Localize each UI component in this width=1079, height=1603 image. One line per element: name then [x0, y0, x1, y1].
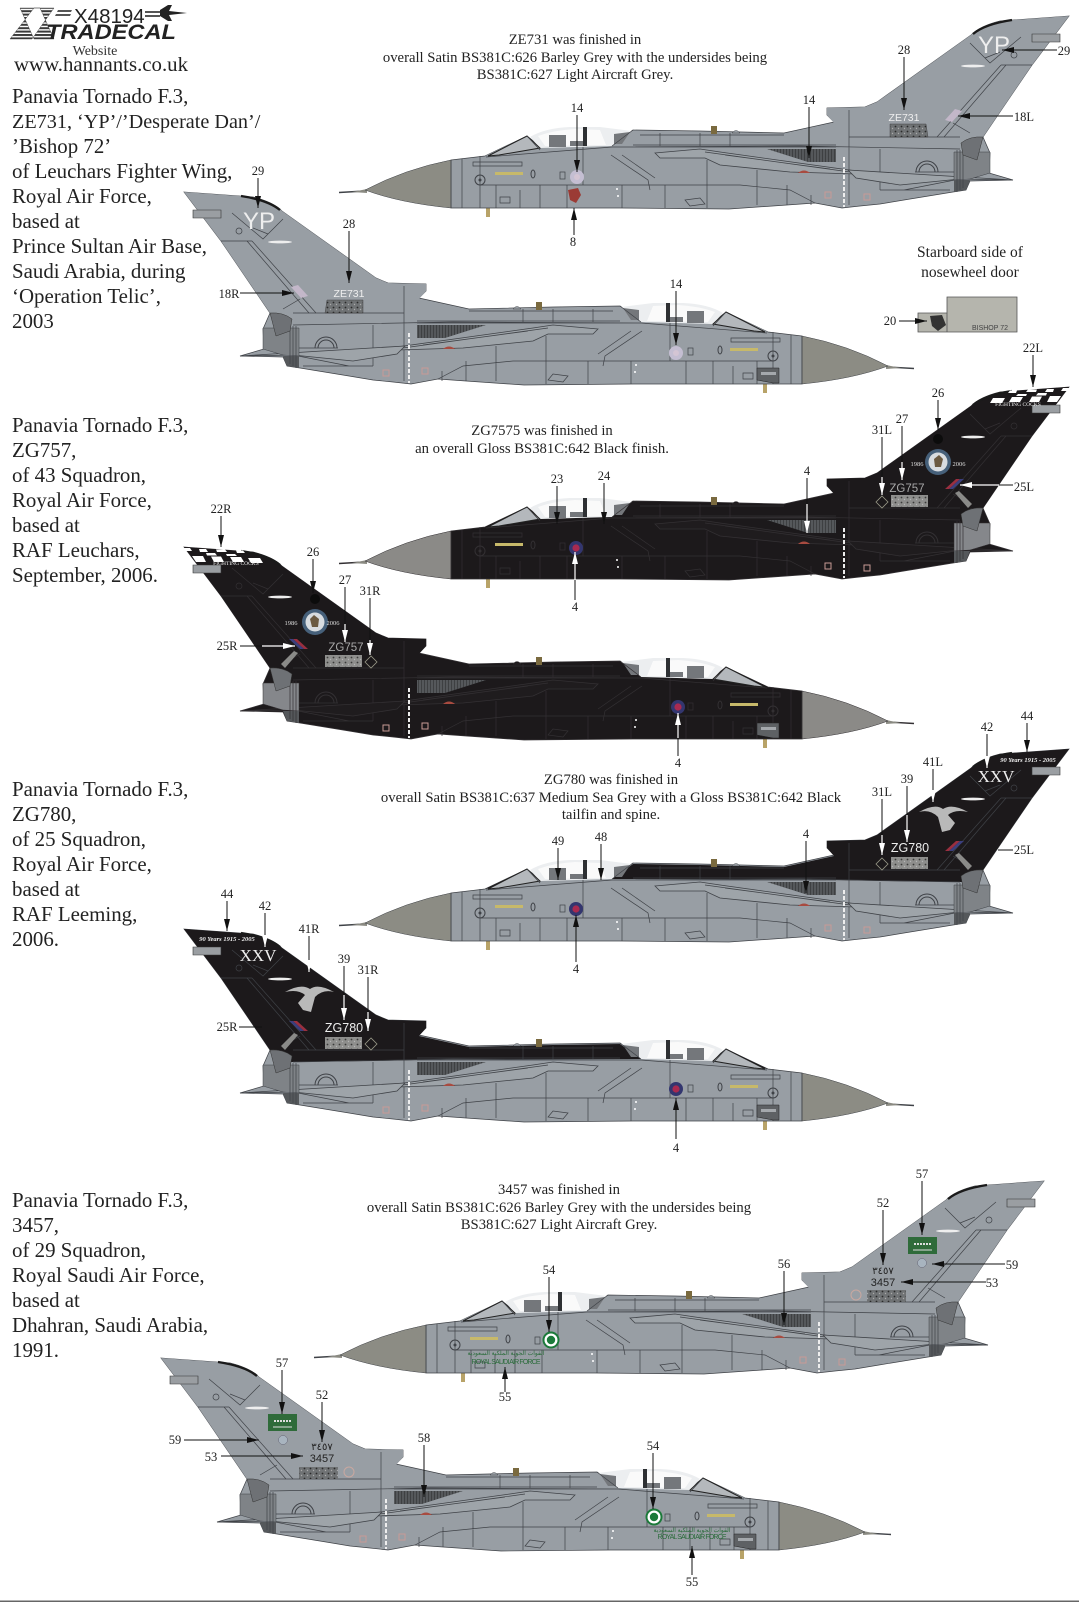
callouts: ZG757: 4	[675, 756, 682, 770]
logo: Xtradecal X48194: TRADECAL	[46, 20, 176, 44]
serial and fin text starboard	[213, 561, 364, 654]
serial ZE731: ZE731	[889, 112, 920, 124]
aircraft: ZG780 starboard side	[184, 929, 914, 1130]
serial and fin text: 1986	[910, 461, 924, 468]
text block: ZG757 description: Royal Air Force,	[12, 488, 152, 512]
callouts: ZE731	[219, 43, 1070, 345]
callouts: ZG757: 31R	[360, 584, 381, 598]
door text: BISHOP 72	[972, 325, 1008, 332]
caption: ZG757 finish: ZG7575 was finished in	[471, 423, 613, 439]
callout 20: 20	[884, 314, 896, 328]
fin code YP starboard: YP	[243, 208, 275, 235]
serial and fin text: 90 Years 1915 - 2005	[1000, 757, 1056, 764]
caption: ZG757 finish: an overall Gloss BS381C:642 Black finish.	[415, 441, 669, 457]
callouts: ZG757: 25R	[217, 639, 238, 653]
text block: ZE731 description: Prince Sultan Air Base,	[12, 234, 207, 258]
caption: ZE731 finish: ZE731 was finished in	[509, 32, 642, 48]
serial and fin text starboard: XXV	[240, 946, 277, 965]
text block: ZE731 description: Saudi Arabia, during	[12, 259, 186, 283]
serial and fin text: XXV	[978, 767, 1015, 786]
logo: Xtradecal X48194	[10, 5, 189, 76]
text block: ZE731 description: Panavia Tornado F.3,	[12, 84, 188, 108]
text block: ZG780 description: based at	[12, 877, 80, 901]
callouts: 3457: 59	[169, 1433, 181, 1447]
callouts: ZG757: 4	[804, 464, 811, 478]
text block: ZE731 description: based at	[12, 209, 80, 233]
serial and fin text starboard: FIGHTING COCKS	[213, 561, 259, 567]
serial and fin text starboard: 1986	[284, 620, 298, 627]
callouts: ZG757	[211, 341, 1043, 770]
text block: ZG780 description: Royal Air Force,	[12, 852, 152, 876]
text block: 3457 description: of 29 Squadron,	[12, 1238, 146, 1262]
text block: ZG780 description: Panavia Tornado F.3,	[12, 777, 188, 801]
aircraft: ZE731 port side	[339, 16, 1069, 217]
callouts: ZG757: 25L	[1014, 480, 1034, 494]
callouts: ZG780: 42	[981, 720, 993, 734]
logo: Xtradecal X48194: Website	[73, 44, 117, 59]
callouts: ZG757: 26	[932, 386, 944, 400]
callouts: ZE731: 29	[252, 164, 264, 178]
fuselage lettering: القوات الجوية الملكية السعودية	[468, 1350, 545, 1357]
caption: 3457 finish: 3457 was finished in	[498, 1182, 621, 1198]
caption: ZG780 finish: overall Satin BS381C:637 Medium Sea Grey with a Gloss BS381C:642 Black	[381, 790, 842, 806]
callouts: ZG757: 27	[896, 412, 908, 426]
serial numbers: ٣٤٥٧	[872, 1266, 894, 1277]
serial ZE731 starboard: ZE731	[334, 288, 365, 300]
callouts: ZG780: 31R	[358, 963, 379, 977]
callouts: ZE731: 28	[898, 43, 910, 57]
callouts: ZG780: 25R	[217, 1020, 238, 1034]
callouts: ZG780: 25L	[1014, 843, 1034, 857]
logo: Xtradecal X48194: X48194	[74, 5, 145, 28]
callouts: ZG780: 4	[803, 827, 810, 841]
callouts: ZG780: 44	[1021, 709, 1034, 723]
text block: ZG757 description: of 43 Squadron,	[12, 463, 146, 487]
callouts: ZG757: 24	[598, 469, 611, 483]
callouts: ZG757: 26	[307, 545, 319, 559]
callouts: ZE731: 8	[570, 235, 576, 249]
logo: Xtradecal X48194: www.hannants.co.uk	[14, 54, 189, 76]
text block: 3457 description: Dhahran, Saudi Arabia,	[12, 1313, 208, 1337]
callouts: ZE731: 29	[1058, 44, 1070, 58]
fuselage lettering	[468, 1350, 545, 1366]
callouts: ZG780: 49	[552, 834, 564, 848]
text block: ZG757 description: Panavia Tornado F.3,	[12, 413, 188, 437]
callouts: 3457: 57	[916, 1167, 928, 1181]
callouts: 3457: 54	[543, 1263, 556, 1277]
callouts: ZG780: 31L	[872, 785, 892, 799]
text block: ZE731 description: ZE731, ‘YP’/’Desperate Dan’/	[12, 111, 261, 133]
serial and fin text: ZG780	[891, 841, 929, 855]
caption: ZG780 finish: ZG780 was finished in	[544, 772, 679, 788]
aircraft: 3457 starboard side	[161, 1358, 891, 1559]
text block: ZG780 description: 2006.	[12, 927, 59, 951]
serial and fin text: ZG757	[889, 483, 925, 495]
callouts: ZE731: 14	[803, 93, 816, 107]
aircraft: 3457 port side	[314, 1181, 1044, 1382]
caption: ZE731 finish: BS381C:627 Light Aircraft Grey.	[477, 67, 673, 83]
serial numbers starboard: ٣٤٥٧	[311, 1442, 333, 1453]
callouts: 3457: 53	[986, 1276, 998, 1290]
heading: nosewheel door: nosewheel door	[921, 264, 1020, 281]
callouts: ZG780: 39	[338, 952, 350, 966]
callouts: ZG757: 23	[551, 472, 563, 486]
serial and fin text	[891, 757, 1056, 855]
callouts: ZG757: 31L	[872, 423, 892, 437]
callouts: ZG780	[217, 709, 1034, 1155]
callouts: ZG780: 4	[573, 962, 580, 976]
callouts: ZG780: 39	[901, 772, 913, 786]
callouts: ZG757: 4	[572, 600, 579, 614]
callouts: ZG780: 41L	[923, 755, 943, 769]
text block: ZG757 description: based at	[12, 513, 80, 537]
callouts: ZG780: 42	[259, 899, 271, 913]
fuselage lettering starboard: ROYAL SAUDI AIR FORCE	[658, 1534, 727, 1541]
callouts: ZE731: 14	[670, 277, 683, 291]
serial numbers: 3457	[871, 1277, 895, 1289]
text block: ZE731 description: Royal Air Force,	[12, 184, 152, 208]
callouts: 3457: 57	[276, 1356, 288, 1370]
callouts: 3457	[169, 1167, 1018, 1589]
callouts: ZG780: 44	[221, 887, 234, 901]
serial numbers starboard: 3457	[310, 1453, 334, 1465]
callout 20	[884, 314, 927, 328]
serial and fin text starboard	[199, 936, 363, 1035]
fuselage lettering: ROYAL SAUDI AIR FORCE	[472, 1359, 541, 1366]
text block: 3457 description: 3457,	[12, 1213, 59, 1237]
callouts: ZE731: 18L	[1014, 110, 1034, 124]
text block: ZG780 description: ZG780,	[12, 802, 76, 826]
caption: ZG780 finish: tailfin and spine.	[562, 807, 660, 823]
text block: ZG780 description: of 25 Squadron,	[12, 827, 146, 851]
serial and fin text: FIGHTING COCKS	[995, 402, 1041, 408]
callouts: 3457: 52	[316, 1388, 328, 1402]
aircraft: ZE731 starboard side	[184, 192, 914, 393]
door drawing	[918, 297, 1017, 332]
caption: ZE731 finish: overall Satin BS381C:626 Barley Grey with the undersides being	[383, 50, 768, 66]
serial numbers starboard	[310, 1442, 334, 1465]
serial and fin text: 2006	[952, 461, 966, 468]
text block: 3457 description: based at	[12, 1288, 80, 1312]
callouts: ZG757: 22L	[1023, 341, 1043, 355]
callouts: ZE731: 14	[571, 101, 584, 115]
caption: 3457 finish: overall Satin BS381C:626 Barley Grey with the undersides being	[367, 1200, 752, 1216]
callouts: 3457: 59	[1006, 1258, 1018, 1272]
text block: ZG757 description: September, 2006.	[12, 563, 158, 587]
caption: 3457 finish: BS381C:627 Light Aircraft Grey.	[461, 1217, 657, 1233]
text block: 3457 description: Panavia Tornado F.3,	[12, 1188, 188, 1212]
serial and fin text starboard: ZG757	[328, 642, 364, 654]
callouts: ZG757: 27	[339, 573, 351, 587]
callouts: ZG757: 22R	[211, 502, 232, 516]
callouts: 3457: 53	[205, 1450, 217, 1464]
callouts: 3457: 58	[418, 1431, 430, 1445]
panel: nosewheel door	[884, 244, 1024, 332]
serial and fin text starboard: 2006	[326, 620, 340, 627]
callouts: ZG780: 41R	[299, 922, 320, 936]
callouts: 3457: 55	[499, 1390, 511, 1404]
text block: ZG757 description: ZG757,	[12, 438, 76, 462]
callouts: 3457: 54	[647, 1439, 660, 1453]
door emblem	[930, 315, 946, 331]
serial and fin text starboard: 90 Years 1915 - 2005	[199, 936, 255, 943]
text block: 3457 description: 1991.	[12, 1338, 59, 1362]
callouts: ZE731: 18R	[219, 287, 240, 301]
text block: 3457 description: Royal Saudi Air Force,	[12, 1263, 205, 1287]
callouts: ZG780: 4	[673, 1141, 680, 1155]
fuselage lettering starboard: القوات الجوية الملكية السعودية	[654, 1527, 731, 1534]
serial and fin text starboard: ZG780	[325, 1021, 363, 1035]
serial and fin text	[889, 402, 1041, 495]
fin code YP: YP	[978, 32, 1010, 59]
callouts: 3457: 56	[778, 1257, 790, 1271]
text block: ZG757 description: RAF Leuchars,	[12, 538, 140, 562]
text block: ZE731 description: of Leuchars Fighter Wing,	[12, 159, 232, 183]
text block: ZE731 description: 2003	[12, 309, 54, 333]
aircraft: ZG757 starboard side	[184, 547, 914, 748]
callouts: ZE731: 28	[343, 217, 355, 231]
serial numbers	[871, 1266, 895, 1289]
text block: ZG780 description: RAF Leeming,	[12, 902, 137, 926]
text block: ZE731 description: ‘Operation Telic’,	[12, 284, 161, 308]
callouts: ZG780: 48	[595, 830, 607, 844]
fuselage lettering starboard	[654, 1527, 731, 1541]
aircraft: ZG780 port side	[339, 749, 1069, 950]
aircraft: ZG757 port side	[339, 387, 1069, 588]
text block: ZE731 description: ’Bishop 72’	[12, 134, 111, 158]
heading: nosewheel door: Starboard side of	[917, 244, 1024, 261]
callouts: 3457: 52	[877, 1196, 889, 1210]
fuselage red emblem	[568, 188, 581, 203]
callouts: 3457: 55	[686, 1575, 698, 1589]
